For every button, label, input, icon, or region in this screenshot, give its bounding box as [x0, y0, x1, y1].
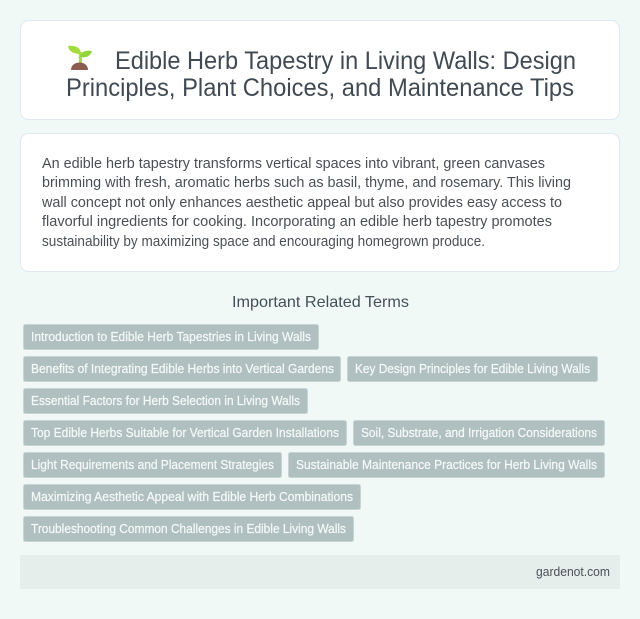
tag — [24, 420, 346, 446]
tag: Sustainable Maintenance Practices for Herb Living Walls — [296, 458, 597, 472]
tag: Troubleshooting Common Challenges in Edible Living Walls — [31, 522, 346, 536]
title: Principles, Plant Choices, and Maintenance Tips — [66, 74, 574, 102]
text block: description: wall concept not only enhances aesthetic appeal but also provides easy access to — [41, 195, 562, 211]
title — [66, 47, 576, 102]
tag: Key Design Principles for Edible Living Walls — [355, 362, 590, 376]
text block: description: brimming with fresh, aromatic herbs such as basil, thyme, and rosemary. This living — [42, 175, 571, 191]
tag: Light Requirements and Placement Strategies — [31, 458, 274, 472]
panel: title card — [20, 20, 620, 120]
icon: seedling — [68, 46, 92, 70]
tag: Essential Factors for Herb Selection in Living Walls — [31, 394, 300, 408]
text block: description: flavorful ingredients for cooking. Incorporating an edible herb tapestry promotes — [42, 214, 552, 230]
text block: description: sustainability by maximizing space and encouraging homegrown produce. — [42, 234, 485, 250]
tag — [24, 516, 354, 542]
panel: description — [20, 134, 620, 272]
text block: description — [41, 156, 571, 250]
tag: Introduction to Edible Herb Tapestries in Living Walls — [31, 330, 311, 344]
title: Edible Herb Tapestry in Living Walls: Design — [115, 47, 576, 75]
text block: description: An edible herb tapestry transforms vertical spaces into vibrant, green canvases — [42, 156, 545, 172]
tag: Soil, Substrate, and Irrigation Considerations — [361, 426, 597, 440]
heading: related terms: Important Related Terms — [232, 294, 409, 311]
footer — [20, 555, 620, 589]
tag — [24, 452, 282, 478]
tag: Benefits of Integrating Edible Herbs into Vertical Gardens — [31, 362, 334, 376]
tag — [24, 324, 318, 350]
tag — [24, 356, 340, 382]
tag list — [24, 324, 604, 542]
tag — [288, 452, 604, 478]
tag — [348, 356, 598, 382]
footer: gardenot.com — [536, 565, 610, 579]
tag — [24, 388, 308, 414]
tag: Top Edible Herbs Suitable for Vertical Garden Installations — [31, 426, 339, 440]
tag — [24, 484, 360, 510]
tag — [354, 420, 604, 446]
tag: Maximizing Aesthetic Appeal with Edible Herb Combinations — [31, 490, 353, 504]
